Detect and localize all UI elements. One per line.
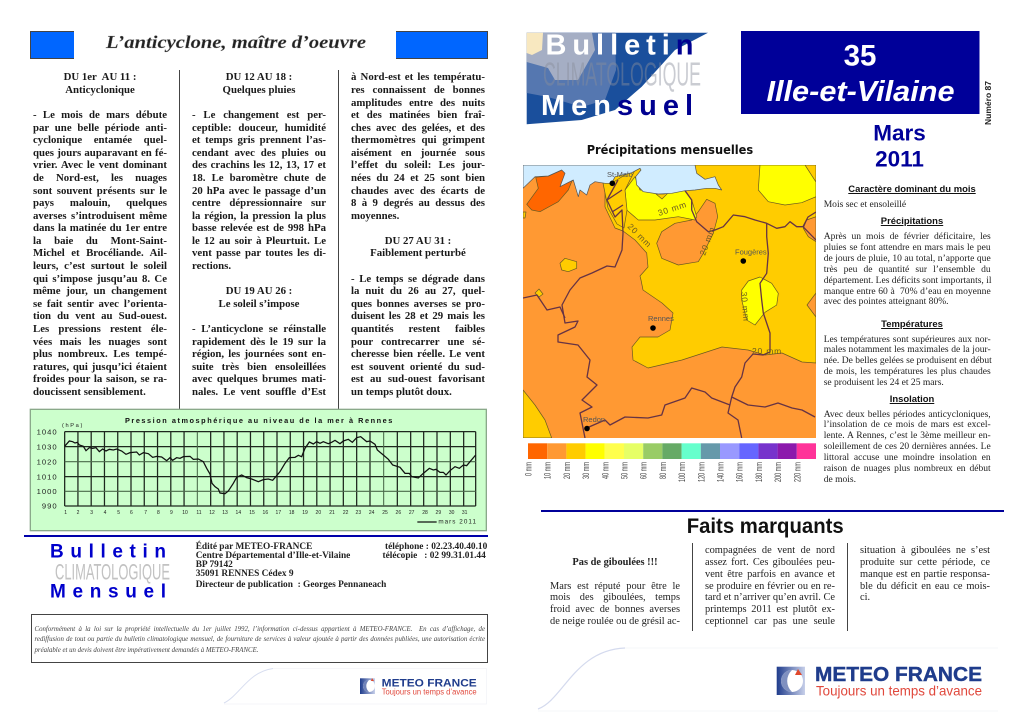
blue box right [396,30,488,59]
text column 2 [192,71,326,398]
y axis labels: 1030 [37,442,58,451]
y axis labels [37,427,58,511]
text column 1: vées mais les nuages sont [33,336,167,348]
city labels: St-Malo [607,170,633,179]
sunshine text [824,409,991,485]
text column 3: la nuit du 26 au 27, quel- [351,285,485,297]
text column 3: chaudes avec des écarts de [351,185,485,197]
precipitation text: département. Les déficits sont importants, il [824,275,992,286]
text column 1: - Le mois de mars débute [33,109,167,121]
highlights column 2: vent être parfois en avance et [705,569,835,580]
text column 1: doucissent sensiblement. [33,386,146,398]
precipitation colour legend [524,443,816,482]
bulletin mensuel logo top [526,30,708,124]
temperature text: née. De belles gelées se produisent en début [824,355,992,366]
x axis labels: 24 [369,510,375,516]
highlights column 3: manque est en partie responsa- [860,569,990,580]
text column 2: la région, la pression la plus [192,210,326,222]
city labels: Redon [583,415,605,424]
x axis labels: 26 [396,510,401,516]
phone numbers: téléphone : 02.23.40.40.10 [385,542,487,552]
text column 1: ratures, qui jusqu’ici étaient [33,361,167,373]
legend labels: 100 mm [677,462,687,482]
publisher details: 35091 RENNES Cédex 9 [196,569,294,579]
Meteo France logo small: METEO FRANCE [382,678,477,690]
highlights column 2: tard et n’arriver qu’en avril. Ce [705,592,835,603]
text column 3: ches avec des gelées, et des [351,122,485,134]
department banner: 35 [844,39,876,72]
x axis labels: 16 [263,510,268,516]
text column 3: à Nord-est et les températu- [351,71,485,83]
x axis labels: 15 [249,510,255,516]
x axis labels: 10 [182,510,188,516]
text column 3: duisent les 28 et 29 mais les [351,310,485,322]
contour labels: 20 mm [697,225,717,257]
text column 1: pays malouin, quelques [33,197,167,209]
text column 2: ceptible: douceur, humidité [192,122,326,134]
Meteo France logo large [538,647,998,712]
Meteo France logo small [224,668,487,704]
precipitation map [523,165,816,438]
city labels [583,170,767,424]
bulletin mensuel logo top: Mensuel [541,90,693,122]
text column 1: plus nombreux. Les tempé- [33,348,167,360]
legend labels [524,462,802,482]
text column 3: pour contrecarrer une sé- [351,336,485,348]
x axis labels: 23 [356,510,361,516]
text column 2: - Le changement est per- [192,109,326,121]
text column 3: nées du 24 et 25 sont bien [351,172,485,184]
publisher details [196,540,386,590]
highlights column 2: se produire en février ou en re- [705,581,835,592]
temperature text: se produisent les 24 et 25 mars. [824,377,944,388]
highlights column 3: produite sur cette période, ce [860,557,990,568]
text column 2: suite très bien ensoleillées [192,361,326,373]
pressure chart [30,408,487,532]
text column 2: Le soleil s’impose [218,298,299,310]
sea [523,165,722,197]
x axis labels: 19 [302,510,308,516]
text column 1: qui s’impose jusqu’au 8. Ce [33,273,167,285]
x axis labels: 14 [236,510,241,516]
legal notice box: préalable et un devis doivent être impérativement demandés à METEO-FRANCE. [34,647,259,654]
text column 1: la baie du Mont-Saint- [33,235,167,247]
text column 3: Faiblement perturbé [370,247,466,259]
sunshine text: de mois. [824,474,856,485]
precipitation text: très peu de quantité sur l’ensemble du [824,264,991,275]
text column 2: DU 12 AU 18 : [226,71,292,83]
x axis labels: 7 [144,510,147,516]
city markers [584,180,746,431]
x axis labels: 4 [104,510,107,516]
text column 2: DU 19 AU 26 : [226,285,292,297]
text column 1: Michel et Brocéliande. Ail- [33,247,167,259]
sunshine text: soleillement de ces 20 dernières années. Le [824,441,991,452]
x axis labels: 17 [276,510,281,516]
precipitation text: de jours de pluie, 10 au total, n’apporte que [824,253,991,264]
pressure curve [65,437,476,494]
heading: precipitation: Précipitations [881,216,943,227]
contour labels: 30 mm [657,199,688,218]
text column 2: vent passe par toutes les di- [192,247,326,259]
chart legend: mars 2011 [438,519,476,526]
text column 2: centre dépressionnaire sur [192,197,326,209]
text column 2: des crachins les 12, 13, 17 et [192,159,326,171]
text column 2: rections. [192,260,231,272]
text column 1: de Nord-est, les nuages [33,172,167,184]
text column 1: froides pour la saison, se ra- [33,373,167,385]
text column 1: ques jours auparavant en fé- [33,147,167,159]
precipitation text: pluies se font attendre en mars mais le peu [824,242,991,253]
text column 1: même jour, un changement [33,285,167,297]
y axis labels: 990 [42,502,58,511]
y axis labels: 1040 [37,427,58,436]
publisher details: Directeur de publication : Georges Pennaneach [196,580,386,590]
temperature text: males notamment les maximales de la jour- [824,344,991,355]
sunshine text: l’insolation de ce mois de mars est excel- [824,419,991,430]
text column 3: thermomètres qui grimpent [351,134,485,146]
phone numbers [382,542,487,561]
text column 2: basse relevée est de 998 hPa [192,222,326,234]
legend labels: 40 mm [600,462,610,479]
bulletin logo small: Mensuel [50,581,166,602]
publisher details: Édité par METEO-FRANCE [196,542,312,552]
contour labels: 30 mm [739,291,752,322]
y axis labels: 1010 [37,472,58,481]
heading: dominant character: Caractère dominant du mois [848,184,976,194]
text column 1: sont souvent présents sur le [33,185,167,197]
text column 3: aisément en journée sous [351,147,485,159]
text column 2: avec quelques brumes mati- [192,373,326,385]
highlights column 1: froid avec de bonnes averses [550,604,680,615]
legal notice box: rediffusion de tout ou partie du bulletin climatologique mensuel, de fourniture de services à valeur ajoutée à partir des données publiées, une autorisation écrite [34,636,485,643]
legend labels: 120 mm [696,462,706,482]
legend labels: 160 mm [735,462,745,482]
legal notice box: Conformément à la loi sur la propriété intellectuelle du 1er juillet 1992, l’information ci-dessus appartient à METEO-FRANCE. En cas d’affichage, de [34,626,485,633]
text column 1: leurs, c’est surtout le soleil [33,260,167,272]
highlights column 1: de neige roulée ou de grésil ac- [550,616,680,627]
y axis labels: 1020 [37,457,58,466]
precipitation text [824,231,992,307]
text column 2: nales. Le vent souffle d’Est [192,386,326,398]
text column 2: le 12 au soir à Pleurtuit. Le [192,235,326,247]
legend labels: 50 mm [620,462,630,479]
text column 2: 18. Le baromètre chute de [192,172,326,184]
unit label: (hPa) [62,423,82,429]
contour labels [626,199,782,356]
x axis labels: 11 [196,510,202,516]
text column 1: tion du vent au Sud-ouest. [33,310,167,322]
x axis labels: 28 [422,510,428,516]
temperature text: de mois, les températures les plus chaudes [824,366,991,377]
text column 1: DU 1er AU 11 : [64,71,136,83]
text column 1: se fait sentir avec l’orienta- [33,298,167,310]
city labels: Fougères [735,248,767,256]
sunshine text: littoral accuse une moindre insolation en [824,452,991,463]
text column 1: cyclonique entamée quel- [33,134,167,146]
issue number: Numéro 87 [983,81,993,125]
title: L’anticyclone, maître d’oeuvre [105,32,366,52]
chart title: Pression atmosphérique au niveau de la mer à Rennes [125,416,392,425]
highlights column 2: compagnées de vent de nord [705,545,835,556]
x axis labels: 8 [157,510,160,516]
highlights column 2: printemps 2011 est plutôt ex- [705,604,835,615]
highlights column 3: situation à giboulées ne s’est [860,545,990,556]
legend labels: 10 mm [543,462,553,479]
text column 3: DU 27 AU 31 : [385,235,451,247]
x axis labels: 1 [64,510,67,516]
y axis labels: 1000 [37,487,58,496]
text column 3: est au sud-ouest favorisant [351,373,485,385]
department boundaries [523,180,816,438]
text column 3: quantités restent faibles [351,323,485,335]
text column 3: cheresse bien réelle. Le vent [351,348,485,360]
legend labels: 80 mm [658,462,668,479]
month and year: 2011 [875,147,924,172]
legend labels: 200 mm [773,462,783,482]
month and year [873,121,926,172]
legend labels: 140 mm [716,462,726,482]
legend labels: 20 mm [562,462,572,479]
highlights column 1: Mars est réputé pour être le [550,581,680,592]
contour labels: 20 mm [626,221,654,250]
legend labels: 180 mm [754,462,764,482]
text column 1 [33,71,167,398]
legend labels: 220 mm [792,462,802,482]
text column 3: res connaissent de bonnes [351,84,485,96]
x axis labels: 6 [130,510,133,516]
highlights column 1: mois des giboulées, temps [550,592,680,603]
text column 2: rapidement dès le 19 sur la [192,336,326,348]
sunshine text: Avec deux belles périodes anticycloniques, [824,409,991,420]
Meteo France logo large: METEO FRANCE [815,664,982,686]
legend labels: 60 mm [639,462,649,479]
publisher details: Centre Départemental d’Ille-et-Vilaine [196,551,350,561]
text column 2: et temps gris prennent l’as- [192,134,326,146]
department banner: Ille-et-Vilaine [766,76,954,108]
text column 3: amplitudes entre des nuits [351,97,485,109]
text column 1: par une belle période anti- [33,122,167,134]
precipitation text: manque entre 60 à 70% d’eau en moyenne [824,286,991,297]
publisher details: BP 79142 [196,560,233,570]
contour labels: 20 mm [752,346,782,356]
x axis labels [64,510,468,516]
legend labels: 30 mm [581,462,591,479]
phone numbers: télécopie : 02 99.31.01.44 [382,551,486,561]
x axis labels: 3 [90,510,93,516]
text column 3: est souvent orienté du sud- [351,361,485,373]
heading: sunshine: Insolation [890,394,934,405]
heading: highlights: Faits marquants [687,515,844,538]
x axis labels: 25 [382,510,388,516]
x axis labels: 22 [343,510,349,516]
x axis labels: 29 [436,510,441,516]
precipitation text: avec des pointes atteignant 80%. [824,296,949,307]
city labels: Rennes [648,314,674,323]
highlights column 3 [860,545,990,603]
department banner [741,31,980,114]
highlights column 3: ci. [860,592,870,603]
text column 1: vrier. Avec le vent dominant [33,159,167,171]
text column 2: région, les journées sont en- [192,348,326,360]
x axis labels: 13 [222,510,228,516]
temperature text [824,334,992,388]
x axis labels: 21 [329,510,335,516]
text column 2: 20 hPa avec le passage d’un [192,185,326,197]
chart legend [417,519,476,526]
text column 3 [351,71,485,398]
precipitation text: Après un mois de février déficitaire, les [824,231,991,242]
text column 2: - L’anticyclone se réinstalle [192,323,326,335]
x axis labels: 2 [77,510,80,516]
highlights column 1 [550,557,680,627]
text column 3: - Le temps se dégrade dans [351,273,485,285]
blue box left [30,30,74,59]
sunshine text: lente. A Rennes, c’est le 3ème meilleur en- [824,430,991,441]
temperature text: Les températures sont supérieures aux nor- [824,334,991,345]
summary text: Mois sec et ensoleillé [824,199,906,210]
x axis labels: 30 [449,510,455,516]
highlights column 1: Pas de giboulées !!! [572,557,658,568]
map heading: Précipitations mensuelles [587,143,753,157]
Meteo France logo small: Toujours un temps d’avance [382,688,477,696]
text column 3: 8 à 9 degrés au dessus des [351,197,485,209]
text column 3: un temps plutôt doux. [351,386,452,398]
bulletin logo small [50,541,170,602]
text column 3: moyennes. [351,210,399,222]
x axis labels: 31 [462,510,468,516]
x axis labels: 9 [170,510,173,516]
x axis labels: 12 [209,510,215,516]
legend labels: 0 mm [524,462,534,476]
text column 3: et des matinées bien fraî- [351,109,485,121]
highlights column 2: assez fort. Ces giboulées peu- [705,557,835,568]
sunshine text: raison de nuages plus nombreux en début [824,463,991,474]
text column 1: Anticyclonique [65,84,135,96]
x axis labels: 20 [316,510,321,516]
text column 3: ques bonnes averses se pro- [351,298,485,310]
text column 1: dans la matinée du 1er entre [33,222,167,234]
bulletin logo small: Bulletin [50,541,166,562]
highlights column 2: ceptionnel car pas une seule [705,616,835,627]
text column 2: cendant avec des pluies ou [192,147,326,159]
highlights column 2 [705,545,835,627]
bulletin mensuel logo top: Bulletin [546,30,694,61]
x axis labels: 18 [289,510,295,516]
legal notice box [30,614,488,663]
Meteo France logo large: Toujours un temps d’avance [816,683,982,699]
text column 2: Quelques pluies [223,84,295,96]
x axis labels: 5 [117,510,120,516]
text column 3: l’effet du soleil: Les jour- [351,159,485,171]
heading: temperatures: Températures [881,318,943,330]
text column 1: averses s’introduisent même [33,210,167,222]
month and year: Mars [873,121,926,146]
x axis labels: 27 [409,510,415,516]
highlights column 3: ble du déficit en eau ce mois- [860,581,990,592]
text column 1: Les pressions restent éle- [33,323,167,335]
